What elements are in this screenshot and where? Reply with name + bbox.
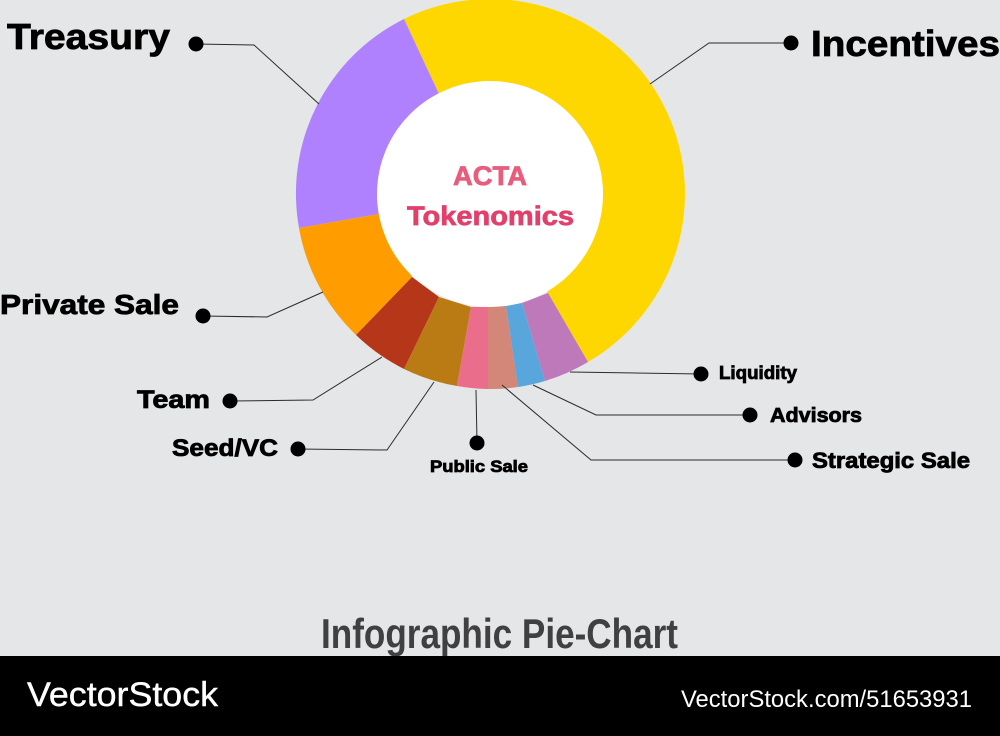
callout: advisors — [533, 385, 862, 427]
title: Infographic Pie-Chart — [321, 610, 678, 657]
callout: strategic sale — [502, 385, 970, 473]
callout: seed/vc: Seed/VC — [172, 435, 278, 462]
callout: treasury — [7, 16, 319, 104]
segment: private sale — [299, 214, 412, 335]
footer bar — [0, 656, 1000, 736]
callout: seed/vc — [172, 382, 434, 462]
segment: treasury — [296, 19, 439, 228]
segment: advisors — [506, 303, 545, 387]
heading line: Tokenomics: Tokenomics — [407, 201, 574, 231]
segment: strategic sale — [488, 306, 518, 389]
callout: liquidity: Liquidity — [719, 363, 797, 383]
callout: incentives — [650, 23, 1000, 84]
center circle — [377, 81, 603, 307]
callout: public sale: Public Sale — [430, 457, 528, 476]
segment: public sale — [457, 307, 488, 389]
callout: treasury: Treasury — [7, 16, 170, 57]
segment: seed/vc — [404, 297, 471, 386]
footer brand: VectorStock — [27, 676, 219, 714]
segment: incentives — [404, 0, 685, 362]
callout: strategic sale: Strategic Sale — [812, 448, 970, 473]
center heading — [407, 161, 574, 231]
callout: team — [137, 357, 382, 414]
callout: public sale — [430, 390, 528, 476]
footer image url: VectorStock.com/51653931 — [681, 686, 972, 713]
donut chart — [296, 0, 685, 389]
callout: liquidity — [570, 363, 797, 383]
heading line: ACTA: ACTA — [453, 161, 527, 191]
segment: liquidity — [522, 293, 588, 381]
callout: team: Team — [137, 386, 210, 414]
segment: team — [356, 277, 439, 369]
callout: advisors: Advisors — [770, 405, 862, 427]
callout: incentives: Incentives — [811, 23, 1000, 64]
callout: private sale — [0, 289, 323, 324]
callout: private sale: Private Sale — [0, 289, 179, 320]
